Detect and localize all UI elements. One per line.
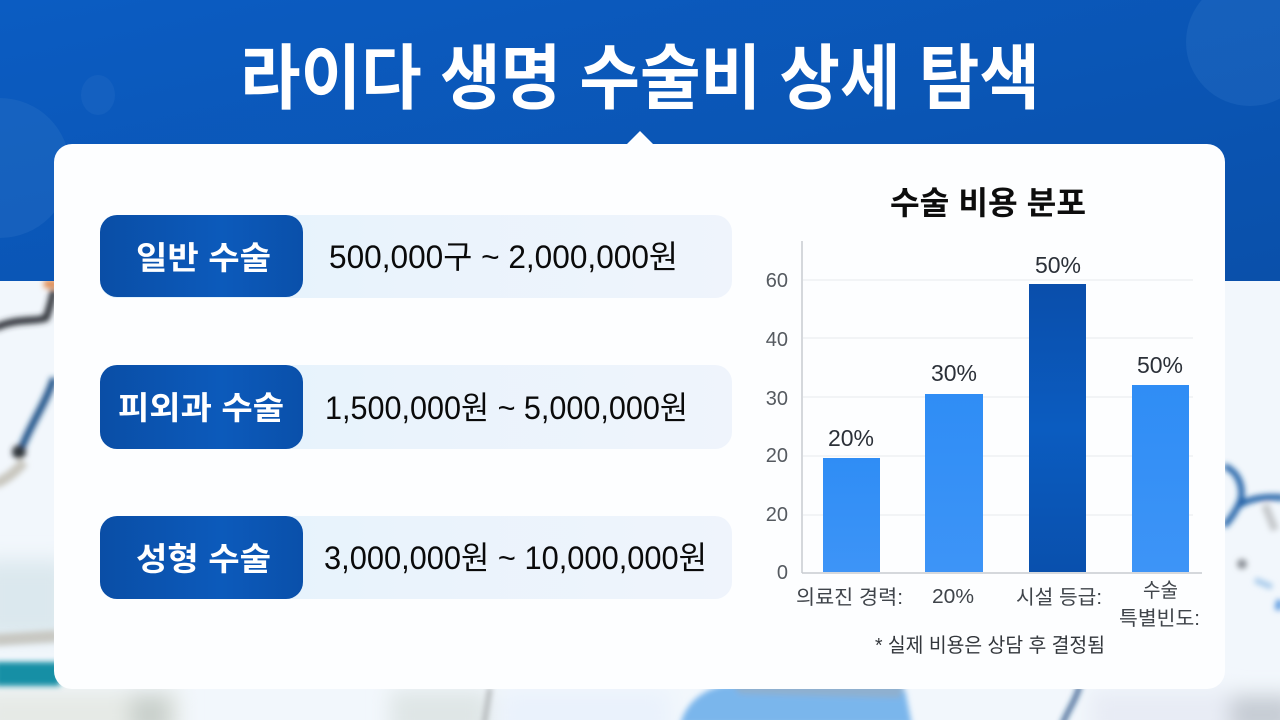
bar value labels: 50% (1137, 352, 1183, 378)
y axis labels: 60 (766, 270, 788, 292)
row: plastic surgery (100, 516, 732, 599)
row: external surgery: 1,500,000원 ~ 5,000,000원 (325, 390, 688, 426)
row: plastic surgery: 성형 수술 (136, 541, 271, 577)
blurred medical photo background (0, 281, 1280, 720)
chart heading: 수술 비용 분포 (890, 185, 1086, 221)
x axis labels: 특별빈도: (1119, 607, 1200, 630)
y axis labels (766, 270, 788, 584)
x axis labels (796, 579, 1200, 630)
x axis labels: 20% (932, 586, 974, 608)
bar value labels: 50% (1035, 252, 1081, 278)
title: 라이다 생명 수술비 상세 탐색 (240, 40, 1040, 119)
bar value labels: 20% (828, 425, 874, 451)
row: external surgery: 피외과 수술 (118, 390, 284, 426)
row: general surgery: 일반 수술 (136, 240, 271, 276)
footnote: * 실제 비용은 상담 후 결정됨 (875, 634, 1105, 657)
y axis labels: 20 (766, 445, 788, 467)
y axis labels: 30 (766, 388, 788, 410)
bar chart: surgery cost distribution (766, 241, 1202, 630)
bars (823, 284, 1189, 572)
bar value labels (828, 252, 1183, 451)
blue header band (0, 0, 1280, 281)
x axis labels: 시설 등급: (1016, 586, 1102, 609)
row: general surgery (100, 215, 732, 298)
row: external surgery (100, 365, 732, 449)
y axis labels: 40 (766, 329, 788, 351)
y axis labels: 0 (777, 562, 788, 584)
row: plastic surgery: 3,000,000원 ~ 10,000,000원 (324, 540, 707, 576)
panel: surgery cost rows (100, 215, 732, 599)
x axis labels: 의료진 경력: (796, 586, 903, 609)
white content card (54, 131, 1225, 689)
x axis labels: 수술 (1143, 579, 1178, 602)
row: general surgery: 500,000구 ~ 2,000,000원 (329, 239, 678, 275)
bar value labels: 30% (931, 360, 977, 386)
y axis labels: 20 (766, 504, 788, 526)
